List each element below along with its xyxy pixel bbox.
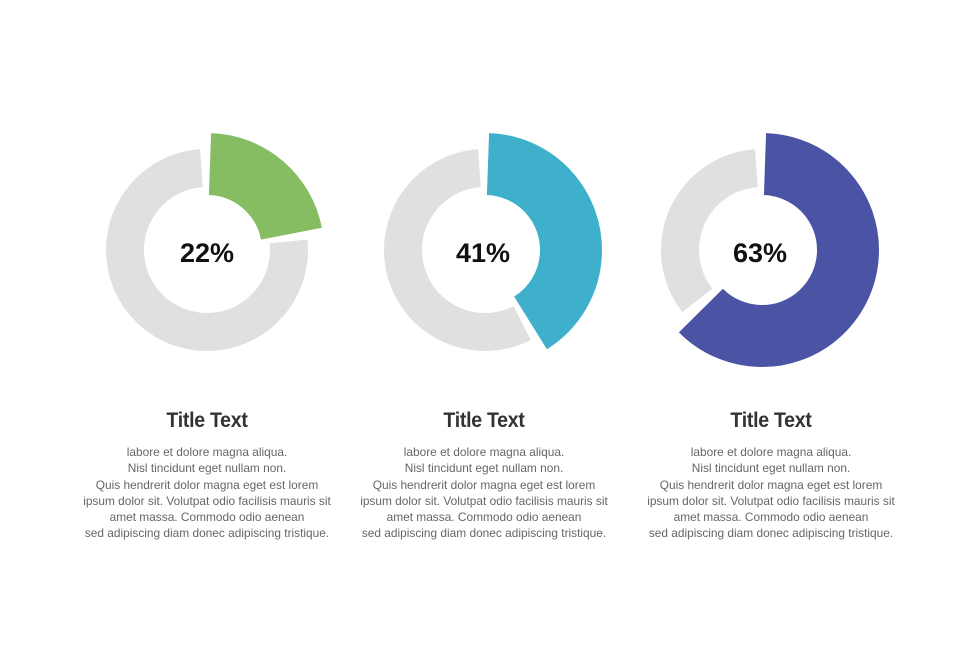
body 1: Quis hendrerit dolor magna eget est lorem [96,478,318,492]
chart: 22% [117,160,297,340]
title 2: Title Text [443,409,525,432]
body 3 [647,445,895,540]
body 2 [360,445,608,540]
title 3: Title Text [730,409,812,432]
body 3: amet massa. Commodo odio aenean [674,510,868,524]
body 3: Quis hendrerit dolor magna eget est lorem [660,478,882,492]
text block 3 [647,409,895,540]
body 3: sed adipiscing diam donec adipiscing tristique. [649,526,893,540]
body 3: ipsum dolor sit. Volutpat odio facilisis mauris sit [647,494,895,508]
body 2: Quis hendrerit dolor magna eget est lorem [373,478,595,492]
donut charts [106,133,879,367]
body 3: Nisl tincidunt eget nullam non. [692,461,850,475]
chart: 63%: 63% [733,238,787,268]
chart: 41% [375,140,595,360]
body 1 [83,445,331,540]
body 3: labore et dolore magna aliqua. [691,445,851,459]
body 2: sed adipiscing diam donec adipiscing tristique. [362,526,606,540]
body 1: amet massa. Commodo odio aenean [110,510,304,524]
chart: 41%: 41% [456,238,510,268]
body 2: amet massa. Commodo odio aenean [387,510,581,524]
text block 2 [360,409,608,540]
body 2: labore et dolore magna aliqua. [404,445,564,459]
body 1: ipsum dolor sit. Volutpat odio facilisis mauris sit [83,494,331,508]
chart: 22%: 22% [180,238,234,268]
text block 1 [83,409,331,540]
title 1: Title Text [166,409,248,432]
chart: 63% [647,135,877,365]
body 1: Nisl tincidunt eget nullam non. [128,461,286,475]
body 2: Nisl tincidunt eget nullam non. [405,461,563,475]
body 1: sed adipiscing diam donec adipiscing tristique. [85,526,329,540]
body 2: ipsum dolor sit. Volutpat odio facilisis mauris sit [360,494,608,508]
body 1: labore et dolore magna aliqua. [127,445,287,459]
